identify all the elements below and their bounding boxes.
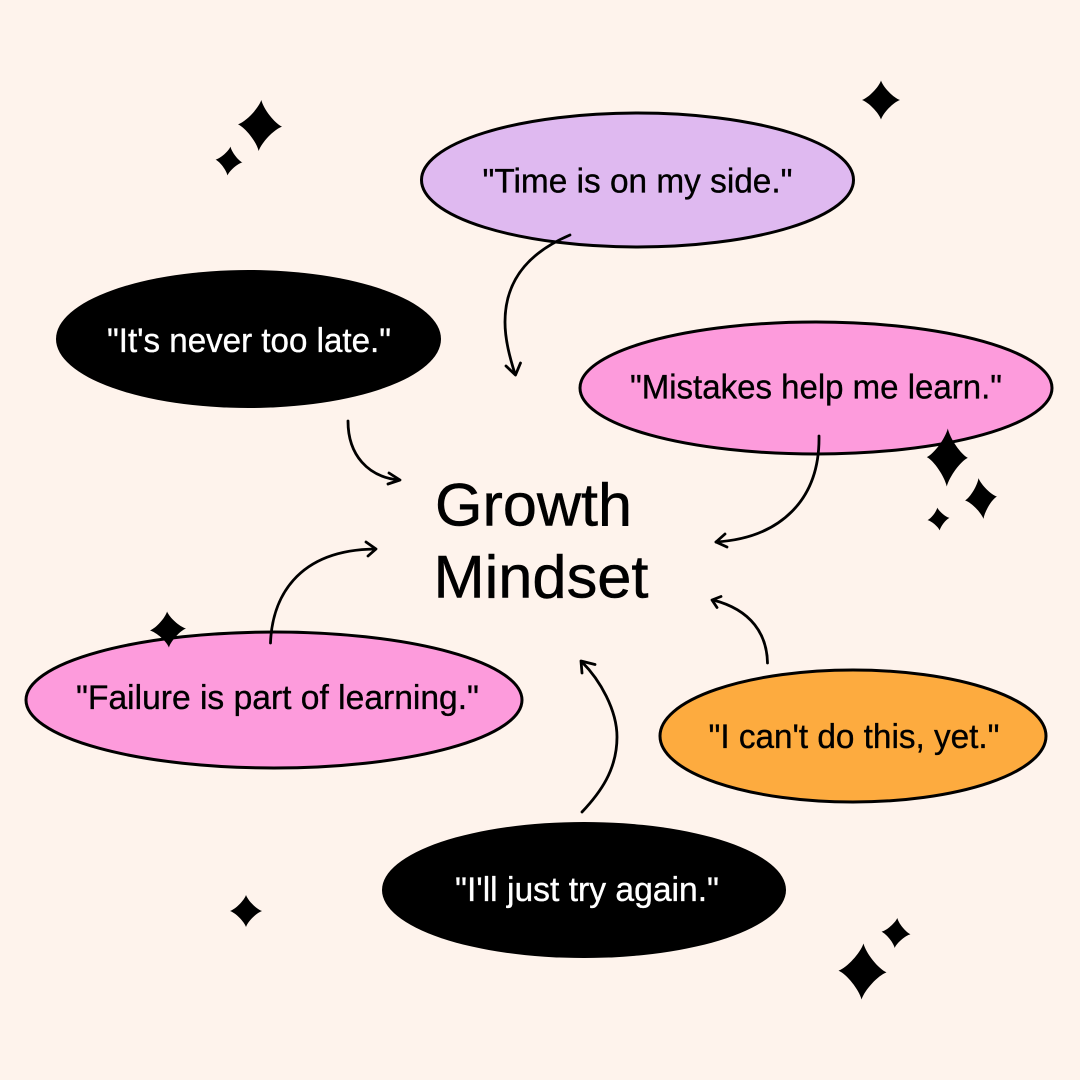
bubble: Time is on my side: "Time is on my side." <box>482 162 792 200</box>
arrow: from It's never too late <box>348 421 400 484</box>
bubble: I'll just try again <box>382 822 786 958</box>
sparkle: on failure bubble <box>149 611 187 648</box>
bubble: Failure is part of learning: "Failure is part of learning." <box>76 679 479 717</box>
bubble: It's never too late: "It's never too late." <box>107 322 391 360</box>
bubble: It's never too late <box>56 270 441 408</box>
bubble: Mistakes help me learn <box>580 322 1052 454</box>
arrow: from I'll just try again <box>581 661 617 812</box>
sparkle: bottom left <box>230 895 262 927</box>
sparkles: bottom right <box>838 917 912 1000</box>
sparkle: top right <box>862 80 900 120</box>
bubble: I'll just try again: "I'll just try again." <box>455 871 719 909</box>
bubble: Failure is part of learning <box>26 632 522 768</box>
arrow: from Failure is part of learning <box>270 542 376 643</box>
title: Growth <box>435 472 632 538</box>
sparkles: right cluster <box>926 428 999 532</box>
bubble: Mistakes help me learn: "Mistakes help me learn." <box>630 368 1002 406</box>
bubble: I can't do this, yet: "I can't do this, yet." <box>708 718 1000 756</box>
bubble: Time is on my side <box>422 113 854 247</box>
bubble: I can't do this, yet <box>660 670 1046 802</box>
arrow: from Mistakes help me learn <box>716 436 819 547</box>
arrow: from I can't do this, yet <box>712 596 768 663</box>
title <box>434 472 649 610</box>
title: Mindset <box>434 544 649 610</box>
sparkles: top left <box>214 99 283 177</box>
arrow: from Time is on my side <box>505 235 570 375</box>
